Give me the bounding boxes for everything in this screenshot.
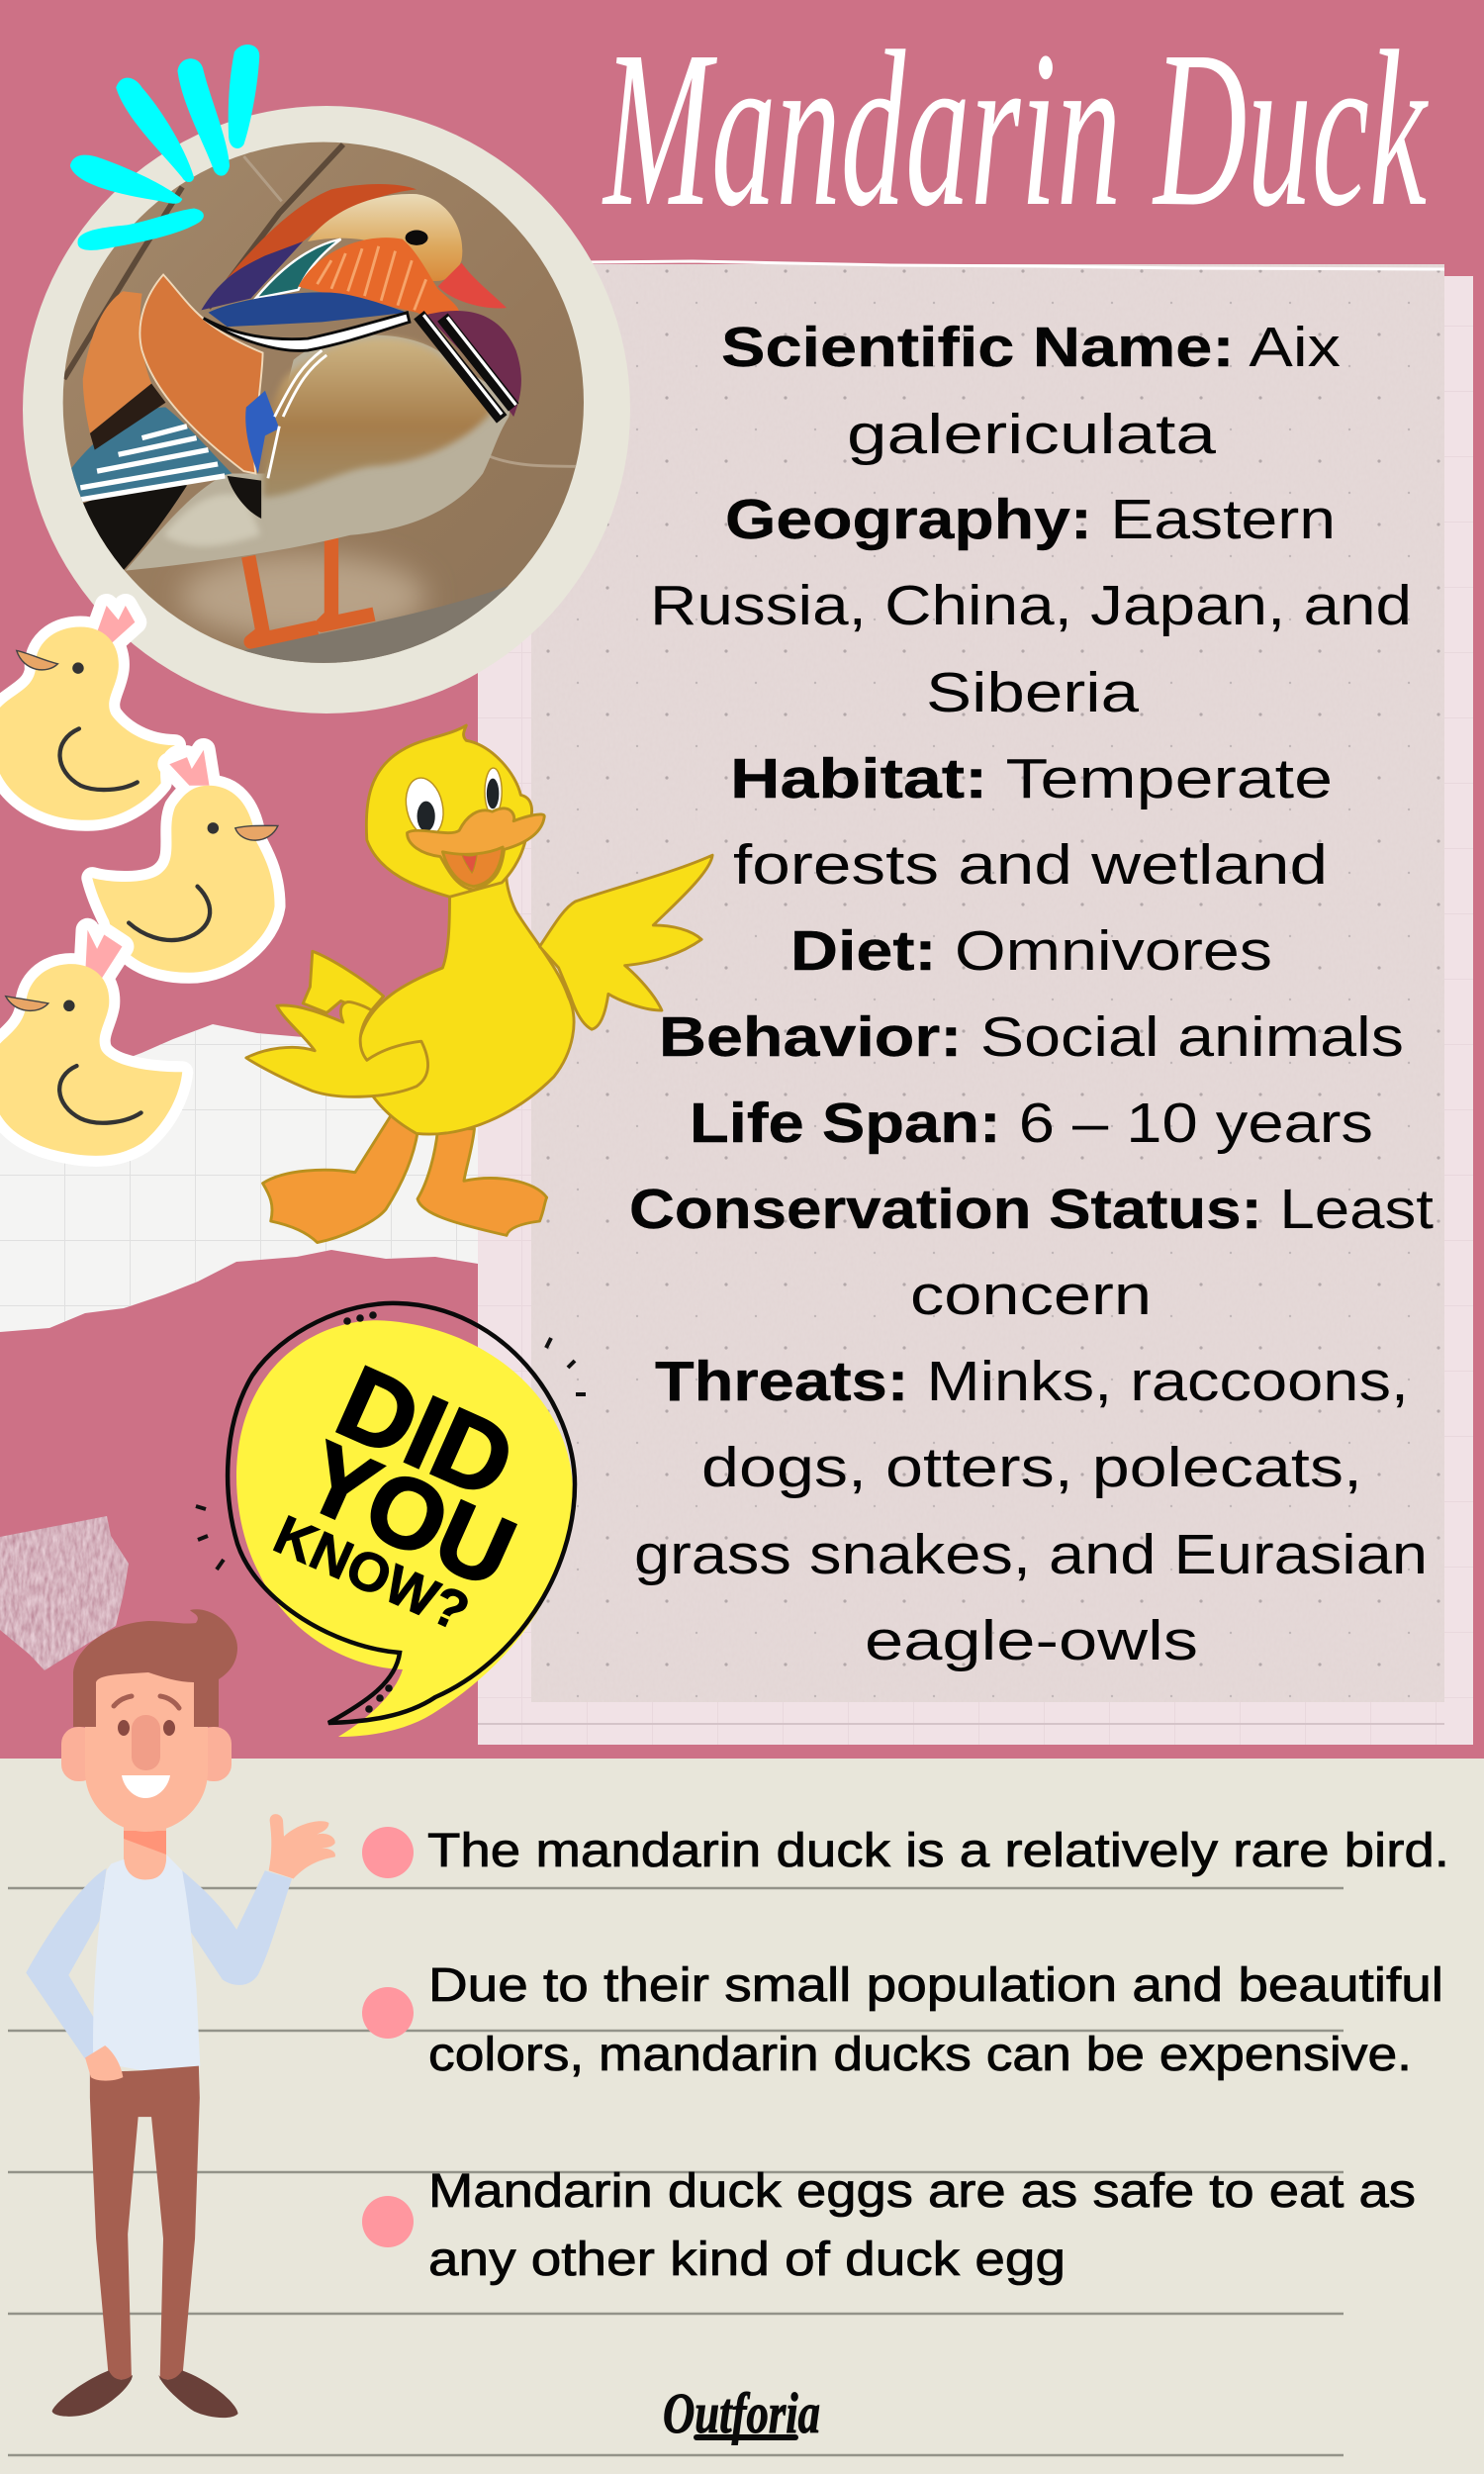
did you know speech bubble [196, 1303, 586, 1737]
did-you-know facts [427, 1825, 1449, 2286]
did-you-know facts: The mandarin duck is a relatively rare bird. [427, 1825, 1449, 1877]
did-you-know facts: colors, mandarin ducks can be expensive. [428, 2029, 1412, 2081]
did-you-know facts: Mandarin duck eggs are as safe to eat as [428, 2165, 1416, 2218]
scientific facts text: forests and wetland [733, 833, 1328, 897]
did you know text: YOU [289, 1421, 530, 1609]
scientific facts text: eagle-owls [865, 1609, 1198, 1672]
man: body and clothes [26, 1814, 335, 2418]
fact: habitat: Habitat: Temperate [730, 747, 1333, 810]
icon: duckling one [0, 606, 175, 820]
fact: threats: Threats: Minks, raccoons, [655, 1350, 1409, 1413]
icon: duckling three [0, 930, 182, 1156]
did you know text: DID [322, 1345, 530, 1521]
did you know text [265, 1345, 530, 1643]
pink background [0, 0, 1484, 1771]
scientific facts text: Siberia [926, 661, 1139, 724]
fact: geography: Geography: Eastern [725, 488, 1336, 551]
scientific facts text: Russia, China, Japan, and [650, 574, 1412, 637]
scientific facts text: grass snakes, and Eurasian [634, 1523, 1428, 1586]
man: hair and face [61, 1609, 237, 1880]
fact: diet: Diet: Omnivores [790, 919, 1272, 983]
logo: Outforia: Outforia [663, 2381, 820, 2445]
did you know text: KNOW? [265, 1503, 478, 1643]
scientific facts text: dogs, otters, polecats, [701, 1436, 1362, 1499]
bullet points [362, 1827, 414, 2247]
scientific facts text: galericulata [847, 403, 1216, 466]
fact: life span: Life Span: 6 – 10 years [690, 1092, 1373, 1155]
icon: cartoon yellow duck [246, 725, 712, 1243]
panel: lined notebook facts area [0, 1759, 1484, 2474]
scientific facts text [629, 316, 1434, 1672]
illustration: waving man [26, 1609, 335, 2418]
scientific facts text: concern [910, 1264, 1152, 1327]
icon: cyan burst ticks [70, 45, 259, 250]
fact: scientific name: Scientific Name: Aix [721, 316, 1341, 379]
icon: duckling two [92, 750, 278, 973]
torn pink tape scrap [0, 1516, 129, 1670]
did-you-know facts: Due to their small population and beautiful [428, 1959, 1443, 2012]
photo: mandarin duck in circle frame [23, 106, 630, 714]
fact: conservation status: Conservation Status: Least [629, 1178, 1434, 1241]
sticker ducklings [0, 606, 278, 1156]
did-you-know facts: any other kind of duck egg [428, 2234, 1066, 2286]
fact: behavior: Behavior: Social animals [659, 1005, 1404, 1069]
pink backing sheet [478, 276, 1473, 1745]
torn white grid paper strip [0, 1024, 478, 1332]
textured paper panel [478, 261, 1444, 1724]
